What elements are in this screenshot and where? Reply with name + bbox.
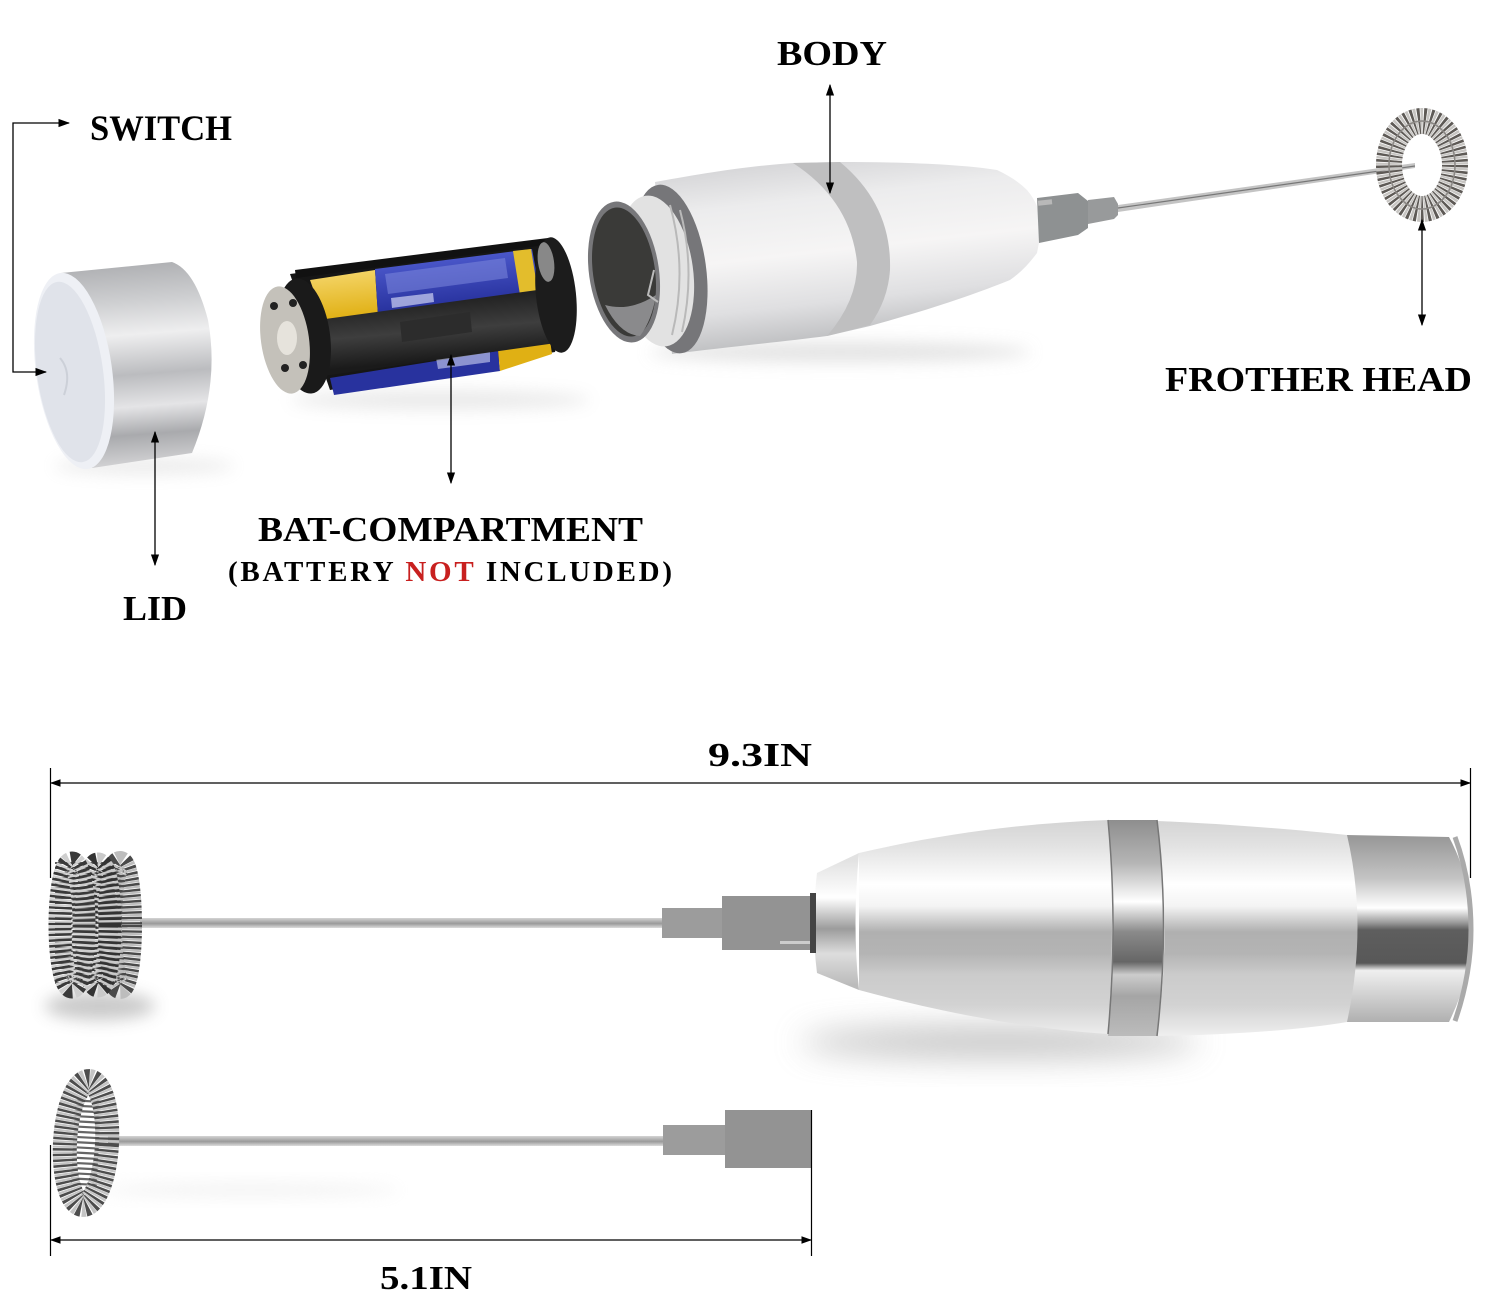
arrow: battery compartment	[450, 355, 452, 483]
main frother, assembled body	[800, 820, 1472, 1057]
heading: lid: LID	[123, 589, 187, 628]
arrow: lid	[154, 432, 156, 565]
opening	[579, 197, 669, 347]
heading: battery compartment: BAT-COMPARTMENT	[258, 510, 643, 549]
heading: frother head: FROTHER HEAD	[1165, 360, 1472, 399]
lid component	[23, 262, 234, 474]
metallic ring	[1108, 820, 1164, 1036]
grey band	[793, 162, 890, 336]
spare whisk rod and connector	[100, 1110, 811, 1196]
whisk coil, frother head	[1389, 121, 1455, 209]
threaded neck	[609, 191, 703, 351]
top battery	[310, 249, 540, 325]
battery compartment	[254, 235, 590, 409]
arrow: body	[829, 85, 831, 193]
dimension: 5.1in: 5.1IN	[380, 1260, 472, 1297]
connector and rod, exploded view	[1037, 163, 1415, 243]
arrow: switch	[13, 123, 69, 372]
gasket	[623, 180, 717, 358]
main frother connector and rod	[140, 893, 816, 953]
metal end plate	[254, 283, 316, 397]
arrow: frother head	[1421, 220, 1423, 325]
dimension: 5.1in	[50, 1110, 812, 1297]
heading: body: BODY	[777, 34, 887, 73]
heading: switch: SWITCH	[90, 108, 232, 148]
holder back	[290, 240, 570, 390]
bottom battery	[330, 340, 552, 395]
dimension: 9.3in	[50, 737, 1470, 878]
dimension: 9.3in: 9.3IN	[708, 737, 813, 774]
frother body, exploded view	[579, 162, 1042, 362]
note: battery not included: (BATTERY NOT INCLUDED)	[228, 556, 672, 588]
whisk: spare head	[62, 1080, 110, 1206]
icon: power symbol	[60, 358, 67, 395]
whisk: main frother	[45, 862, 155, 1020]
